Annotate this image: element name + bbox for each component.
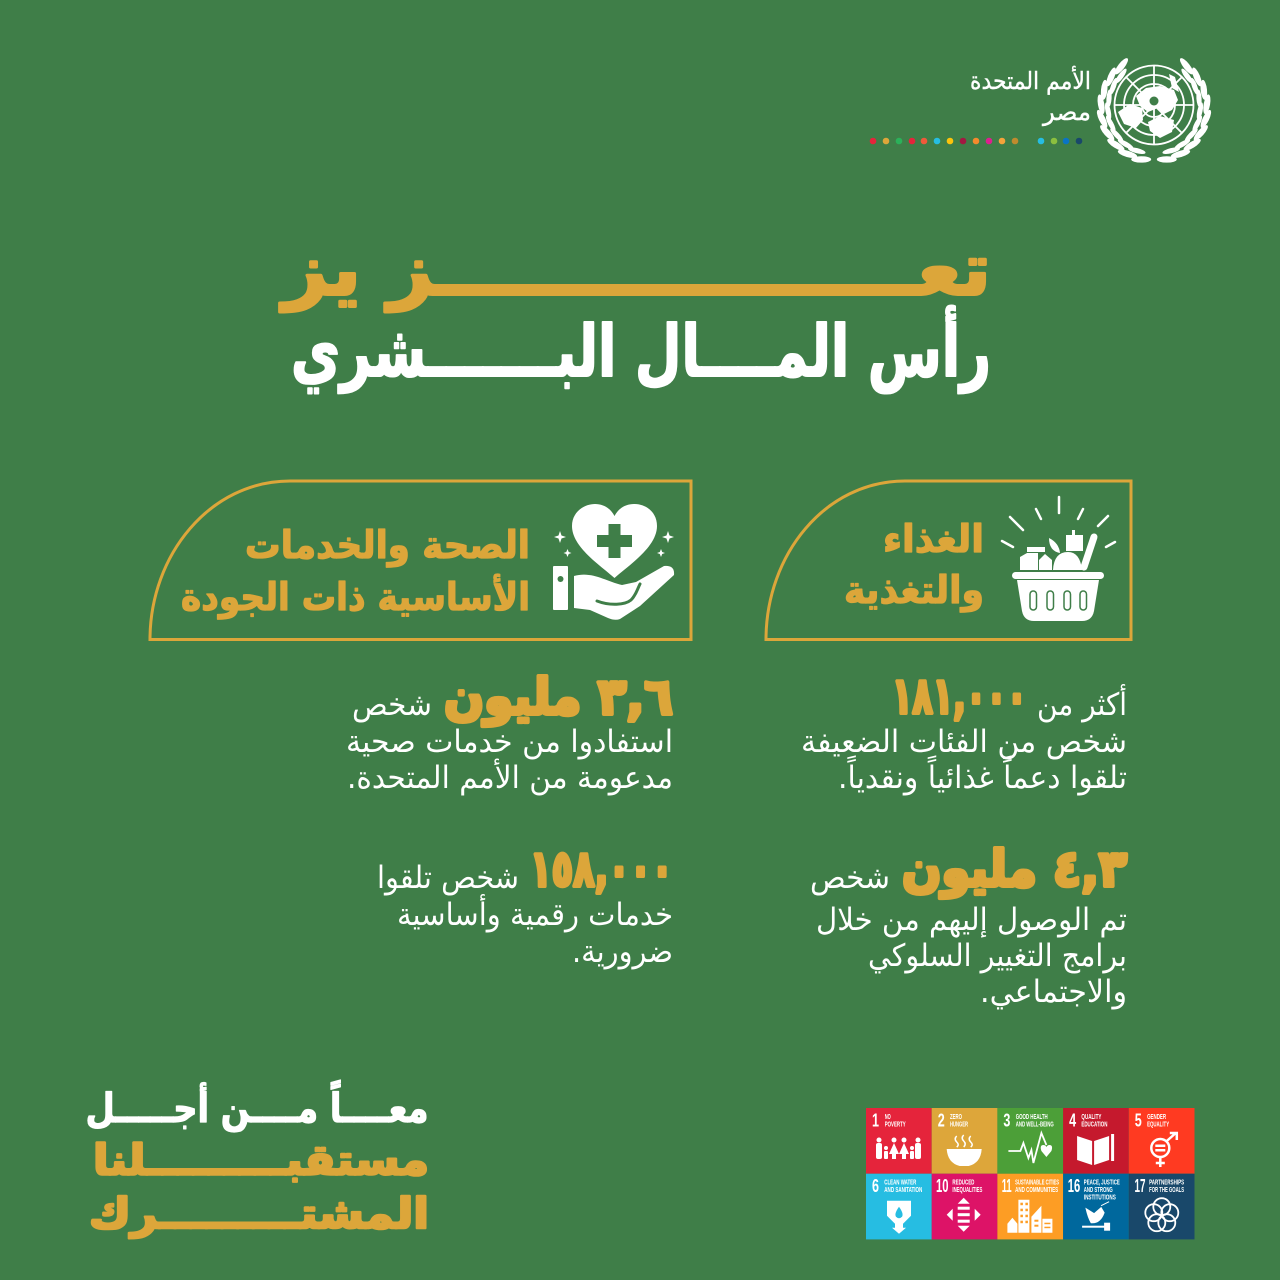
stat: 3.6 million people: استفادوا من خدمات صحية bbox=[346, 724, 673, 760]
SDG tiles bbox=[866, 1108, 1194, 1239]
tile: SDG 3: 3 bbox=[1003, 1110, 1010, 1130]
tile: SDG 3 bbox=[997, 1108, 1063, 1174]
stat: 181,000 people: تلقوا دعماً غذائياً ونقدياً. bbox=[838, 755, 1127, 796]
stat: 4.3 million people bbox=[810, 840, 1127, 1010]
tile: SDG 1: NO bbox=[885, 1114, 891, 1121]
tile: SDG 11: SUSTAINABLE CITIES bbox=[1015, 1179, 1059, 1186]
panel: health and basic services bbox=[150, 481, 691, 640]
tile: SDG 4: QUALITY bbox=[1081, 1114, 1102, 1121]
tile: SDG 17: PARTNERSHIPS bbox=[1149, 1179, 1184, 1186]
icon: heart on hand bbox=[553, 504, 674, 620]
stat: 158,000 people: خدمات رقمية وأساسية bbox=[397, 894, 673, 933]
logo text: الأمم المتحدة bbox=[970, 66, 1091, 95]
header: UN Egypt logo bbox=[870, 56, 1213, 163]
tile: SDG 2: ZERO bbox=[950, 1114, 962, 1121]
tile: SDG 16: INSTITUTIONS bbox=[1084, 1195, 1116, 1202]
tile: SDG 10 bbox=[932, 1174, 997, 1239]
icon: UN emblem bbox=[1095, 56, 1213, 163]
icon: food basket bbox=[1002, 497, 1115, 621]
tile: SDG 4: EDUCATION bbox=[1081, 1122, 1107, 1128]
stat: 3.6 million people: ٣,٦ مليون bbox=[444, 668, 673, 727]
tile: SDG 1: 1 bbox=[872, 1110, 879, 1130]
tile: SDG 16: PEACE, JUSTICE bbox=[1084, 1179, 1120, 1186]
tile: SDG 10: REDUCED bbox=[952, 1179, 974, 1186]
stat: 158,000 people: ١٥٨,٠٠٠ bbox=[530, 840, 673, 898]
tile: SDG 11 bbox=[997, 1174, 1063, 1239]
panel heading: الغذاء bbox=[883, 517, 984, 561]
tile: SDG 2 bbox=[932, 1108, 997, 1174]
stat: 4.3 million people: تم الوصول إليهم من خلال bbox=[816, 902, 1127, 938]
stat: 4.3 million people: شخص bbox=[810, 860, 890, 896]
tile: SDG 11: AND COMMUNITIES bbox=[1015, 1187, 1058, 1194]
stat: 158,000 people: شخص تلقوا bbox=[377, 860, 519, 896]
tile: SDG 2: HUNGER bbox=[950, 1122, 968, 1128]
tile: SDG 16: AND STRONG bbox=[1084, 1187, 1113, 1194]
tile: SDG 2: 2 bbox=[938, 1110, 945, 1130]
panel: food and nutrition bbox=[766, 481, 1131, 640]
panel heading bbox=[844, 517, 984, 613]
tile: SDG 1 bbox=[866, 1108, 932, 1174]
tile: SDG 4: 4 bbox=[1069, 1110, 1076, 1130]
stat: 3.6 million people: شخص bbox=[352, 687, 432, 723]
coloured SDG dots bbox=[870, 138, 1082, 144]
stat: 3.6 million people bbox=[346, 668, 673, 796]
tile: SDG 6: AND SANITATION bbox=[884, 1187, 922, 1194]
slogan: مستقبـــــــــلنا bbox=[93, 1136, 429, 1184]
title: تعــــــــــــــــــز يز bbox=[280, 228, 991, 312]
stat: 158,000 people bbox=[377, 840, 673, 970]
tile: SDG 17 bbox=[1129, 1174, 1194, 1239]
tile: SDG 3: AND WELL-BEING bbox=[1016, 1122, 1054, 1128]
stat: 181,000 people: ١٨١,٠٠٠ bbox=[892, 667, 1027, 725]
title: رأس المــــال البـــــــشري bbox=[291, 305, 991, 393]
tile: SDG 17: FOR THE GOALS bbox=[1149, 1187, 1184, 1194]
tile: SDG 5 bbox=[1129, 1108, 1194, 1174]
stat: 3.6 million people: مدعومة من الأمم المتحدة. bbox=[347, 758, 673, 796]
tile: SDG 17: 17 bbox=[1135, 1176, 1146, 1196]
tile: SDG 16: 16 bbox=[1068, 1176, 1080, 1196]
title bbox=[280, 228, 991, 393]
tile: SDG 6 bbox=[866, 1174, 932, 1239]
panel heading: الأساسية ذات الجودة bbox=[181, 573, 530, 619]
tile: SDG 10: INEQUALITIES bbox=[952, 1187, 983, 1194]
stat: 4.3 million people: برامج التغيير السلوكي bbox=[868, 938, 1127, 974]
stat: 158,000 people: ضرورية. bbox=[572, 934, 673, 970]
logo text bbox=[970, 66, 1091, 126]
stat: 181,000 people: شخص من الفئات الضعيفة bbox=[801, 724, 1127, 760]
panel heading: والتغذية bbox=[844, 568, 984, 613]
tile: SDG 1: POVERTY bbox=[885, 1122, 906, 1128]
logo text: مصر bbox=[1042, 98, 1091, 126]
tile: SDG 5: EQUALITY bbox=[1147, 1122, 1169, 1128]
stat: 4.3 million people: والاجتماعي. bbox=[980, 974, 1127, 1010]
stat: 4.3 million people: ٤,٣ مليون bbox=[902, 840, 1127, 899]
tile: SDG 16 bbox=[1063, 1174, 1129, 1239]
stat: 181,000 people: أكثر من bbox=[1037, 684, 1127, 723]
tile: SDG 6: 6 bbox=[872, 1176, 879, 1196]
slogan bbox=[86, 1079, 429, 1239]
slogan: معــــاً مــــن أجـــــل bbox=[86, 1079, 428, 1132]
stat: 181,000 people bbox=[801, 667, 1127, 796]
tile: SDG 3: GOOD HEALTH bbox=[1016, 1114, 1048, 1121]
tile: SDG 5: GENDER bbox=[1147, 1114, 1166, 1121]
tile: SDG 10: 10 bbox=[936, 1176, 949, 1196]
tile: SDG 11: 11 bbox=[1002, 1176, 1012, 1196]
tile: SDG 5: 5 bbox=[1135, 1110, 1142, 1130]
panel heading bbox=[181, 523, 530, 619]
panel heading: الصحة والخدمات bbox=[245, 523, 530, 568]
tile: SDG 6: CLEAN WATER bbox=[884, 1179, 916, 1186]
tile: SDG 4 bbox=[1063, 1108, 1129, 1174]
slogan: المشتـــــــــرك bbox=[89, 1189, 429, 1239]
